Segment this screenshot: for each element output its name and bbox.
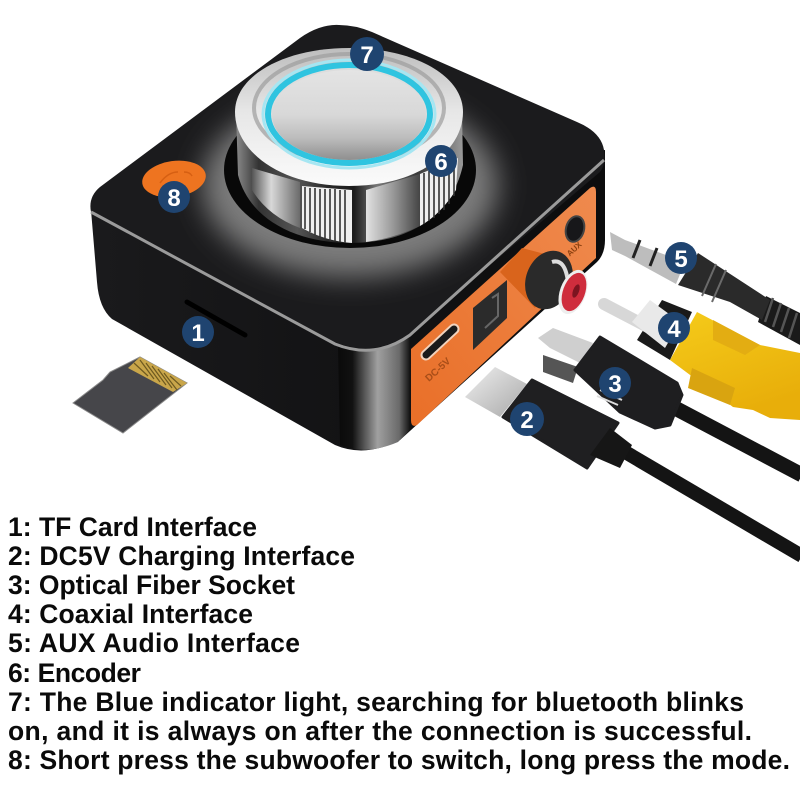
aux port: AUX	[565, 240, 584, 258]
badge 2: 2	[520, 407, 534, 434]
encoder knob	[224, 48, 476, 248]
plug: yellow RCA	[604, 300, 800, 420]
aux port	[563, 214, 587, 258]
badge 5	[665, 242, 697, 274]
coaxial port	[500, 244, 593, 318]
badge 3	[599, 367, 631, 399]
plug: AUX 3.5mm	[610, 232, 800, 345]
badge 2	[510, 402, 544, 436]
device body	[90, 25, 605, 450]
optical port	[473, 280, 507, 350]
cable: USB-C	[620, 449, 800, 556]
badge 6: 6	[434, 149, 448, 176]
badge 1	[182, 316, 214, 348]
blue indicator ring	[268, 65, 430, 163]
front corner highlight	[338, 335, 410, 450]
badge 8	[158, 181, 190, 213]
legend text: 2: DC5V Charging Interface	[8, 541, 355, 571]
icon: orange mode button	[140, 157, 208, 201]
TF slot	[187, 302, 245, 335]
legend text: 8: Short press the subwoofer to switch, long press the mode.	[8, 745, 790, 775]
glow around knob	[202, 93, 498, 277]
badge 1: 1	[191, 320, 205, 347]
badge 6	[425, 145, 457, 177]
legend text: 1: TF Card Interface	[8, 512, 257, 542]
badge 4: 4	[667, 316, 681, 343]
icon: TF card	[73, 357, 187, 433]
badge 4	[658, 312, 690, 344]
legend text: 6: Encoder	[8, 658, 141, 688]
plug: USB-C	[465, 367, 632, 468]
badge 7	[350, 37, 384, 71]
side ports	[423, 214, 593, 384]
knob top rim	[235, 48, 463, 186]
badge 3: 3	[608, 371, 622, 398]
orange connector panel	[411, 187, 596, 426]
number badges	[158, 37, 697, 436]
legend text: 5: AUX Audio Interface	[8, 628, 300, 658]
USB-C port: DC-5V	[423, 356, 453, 384]
legend text	[8, 512, 790, 775]
knob dome	[272, 70, 426, 160]
knob facets	[252, 168, 300, 228]
badge 7: 7	[360, 42, 374, 69]
knurled section right	[420, 158, 458, 226]
legend text: on, and it is always on after the connection is successful.	[8, 716, 752, 746]
device top surface	[90, 25, 604, 348]
badge 8: 8	[167, 185, 181, 212]
legend text: 4: Coaxial Interface	[8, 599, 253, 629]
plug: optical	[538, 328, 682, 428]
knurled section left	[302, 186, 352, 243]
badge 5: 5	[674, 246, 688, 273]
legend text: 7: The Blue indicator light, searching for bluetooth blinks	[8, 687, 744, 717]
USB-C port	[423, 329, 454, 384]
legend text: 3: Optical Fiber Socket	[8, 570, 295, 600]
cable: optical	[675, 408, 800, 475]
